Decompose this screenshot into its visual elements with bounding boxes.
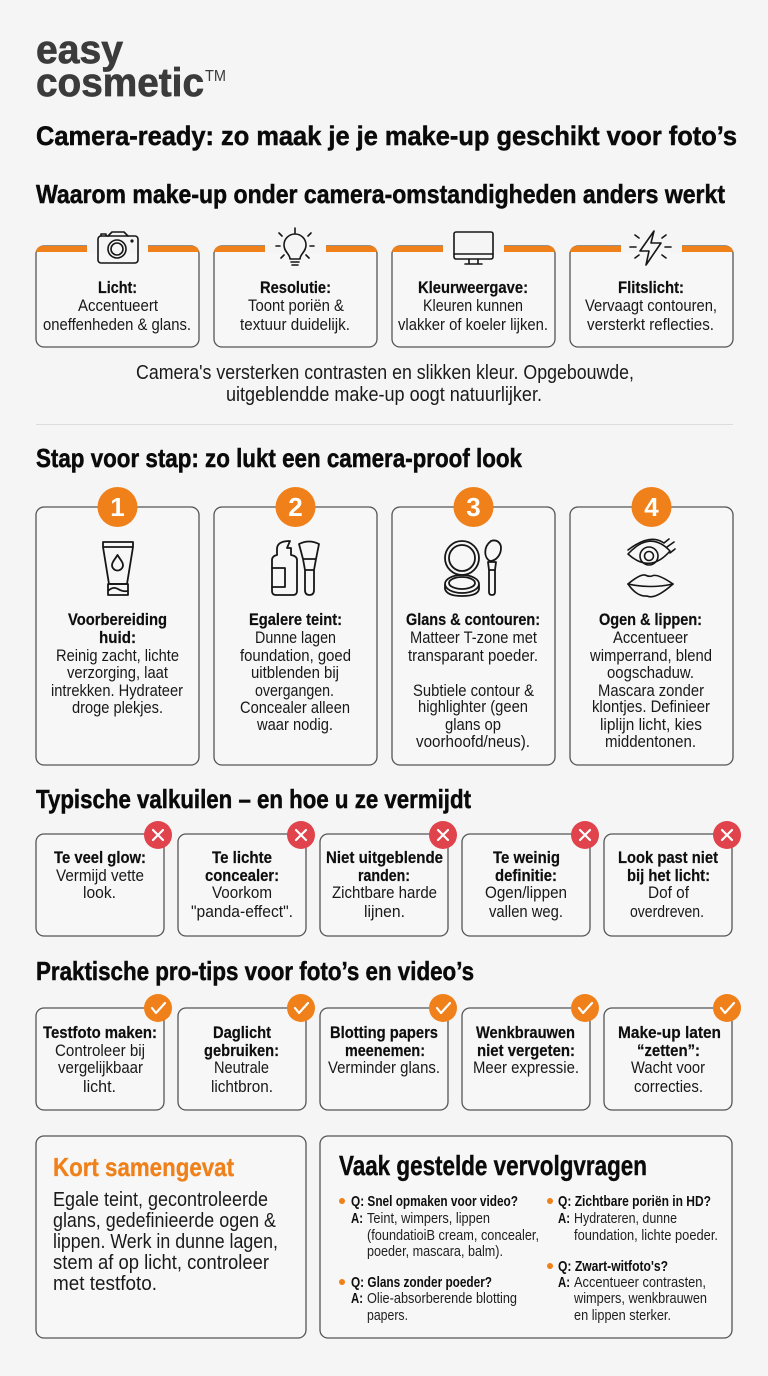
panel: stap 2 — [214, 487, 377, 765]
icon: check badge — [713, 994, 741, 1022]
text: stap 3: transparant poeder. — [408, 646, 538, 665]
text: daglicht — [204, 1023, 279, 1096]
text: stap 1: droge plekjes. — [72, 698, 163, 717]
faq: zichtbare porien — [547, 1193, 718, 1244]
text: stap 4: middentonen. — [605, 732, 696, 751]
panel: valkuil te lichte concealer — [178, 821, 315, 936]
text: te veel glow: Te veel glow: — [54, 848, 146, 867]
faq: glans zonder poeder: A: — [351, 1290, 363, 1307]
text: stap 2: uitblenden bij — [251, 663, 339, 682]
panel: licht — [36, 232, 199, 347]
panel: tip wenkbrauwen — [462, 994, 599, 1110]
text: stap 3: highlighter (geen — [418, 697, 528, 716]
icon: eye and lips — [628, 539, 675, 597]
logo — [36, 28, 226, 105]
text: stap 1: huid: — [99, 628, 136, 647]
icon: foundation and brush — [272, 541, 319, 595]
icon: cross badge — [429, 821, 457, 849]
icon: check badge — [429, 994, 457, 1022]
text: te weinig definitie: vallen weg. — [489, 902, 563, 921]
text: stap 4: oogschaduw. — [607, 663, 694, 682]
text: stap 1 — [51, 610, 183, 717]
text: te veel glow: look. — [83, 883, 116, 902]
heading: valkuilen: Typische valkuilen – en hoe u ze vermijdt — [36, 784, 471, 814]
panel: vervolgvragen — [320, 1136, 732, 1338]
text: kleurweergave: Kleurweergave: — [418, 278, 528, 297]
badge: 4 — [632, 487, 672, 527]
text: look past niet: Dof of — [648, 883, 689, 902]
panel: kleurweergave — [392, 232, 555, 347]
faq: zwart-witfoto's — [547, 1258, 707, 1324]
text: stap 1: Reinig zacht, lichte — [56, 646, 179, 665]
icon: check badge — [287, 994, 315, 1022]
panel: kort samengevat — [36, 1136, 306, 1338]
text: kleurweergave: vlakker of koeler lijken. — [398, 315, 548, 334]
icon: compact and brush — [445, 540, 501, 596]
text: testfoto: licht. — [83, 1077, 116, 1096]
faq: snel opmaken — [339, 1193, 539, 1260]
logo: cosmetic — [36, 61, 204, 105]
faq: snel opmaken: A: — [351, 1210, 363, 1227]
text: stap 3: Glans & contouren: — [406, 610, 540, 629]
faq: snel opmaken: Teint, wimpers, lippen — [367, 1210, 490, 1227]
text: stap 3: Matteer T-zone met — [410, 628, 537, 647]
text: testfoto — [43, 1023, 157, 1096]
text: resolutie: textuur duidelijk. — [240, 315, 350, 334]
text: blotting papers: Blotting papers — [330, 1023, 438, 1042]
faq: snel opmaken: Q: Snel opmaken voor video? — [351, 1193, 518, 1210]
icon: cross badge — [713, 821, 741, 849]
heading: stap voor stap: Stap voor stap: zo lukt een camera-proof look — [36, 443, 522, 473]
panel: flitslicht — [570, 231, 733, 347]
faq: glans zonder poeder: Olie-absorberende blotting — [367, 1290, 517, 1307]
text: samenvatting: met testfoto. — [53, 1273, 157, 1295]
text: licht — [43, 278, 191, 334]
text: look past niet — [618, 848, 718, 921]
faq: glans zonder poeder: papers. — [367, 1307, 408, 1324]
text: stap 4: Accentueer — [613, 628, 688, 647]
text: make-up laten zetten — [618, 1023, 721, 1096]
text: niet uitgeblende randen: randen: — [358, 866, 410, 885]
text: kleurweergave: Kleuren kunnen — [423, 296, 523, 315]
text: te lichte concealer: concealer: — [205, 866, 279, 885]
icon: tube — [103, 542, 133, 595]
text: flitslicht: Vervaagt contouren, — [585, 296, 717, 315]
text: look past niet: overdreven. — [630, 902, 704, 921]
icon: monitor — [454, 232, 493, 264]
text: samenvatting: glans, gedefinieerde ogen & — [53, 1210, 277, 1232]
panel: tip testfoto — [36, 994, 172, 1110]
text: stap 4: wimperrand, blend — [589, 646, 712, 665]
panel: resolutie — [214, 228, 377, 347]
text: flitslicht: Flitslicht: — [618, 278, 684, 297]
faq: glans zonder poeder: Q: Glans zonder poeder? — [351, 1274, 492, 1291]
text: daglicht: Daglicht — [213, 1023, 271, 1042]
text: blotting papers: Verminder glans. — [328, 1058, 440, 1077]
text: look past niet: Look past niet — [618, 848, 718, 867]
text: intro paragraph: uitgeblendde make-up oogt natuurlijker. — [226, 384, 542, 406]
icon: cross badge — [144, 821, 172, 849]
text: te lichte concealer: "panda-effect". — [191, 902, 293, 921]
text: testfoto: vergelijkbaar — [58, 1058, 143, 1077]
faq: glans zonder poeder — [339, 1274, 517, 1324]
text: licht: Licht: — [98, 278, 137, 297]
text: stap 1: Voorbereiding — [68, 610, 167, 629]
text: resolutie: Toont poriën & — [248, 296, 345, 315]
text: te lichte concealer: Voorkom — [212, 883, 272, 902]
text: wenkbrauwen: Wenkbrauwen — [476, 1023, 575, 1042]
text: make-up laten zetten: “zetten”: — [637, 1041, 700, 1060]
icon: camera — [98, 232, 138, 263]
icon: check badge — [571, 994, 599, 1022]
panel: stap 3 — [392, 487, 555, 765]
badge: 2 — [276, 487, 316, 527]
text: te weinig definitie: Ogen/lippen — [485, 883, 567, 902]
badge: 4: 4 — [644, 492, 659, 522]
text: make-up laten zetten: correcties. — [634, 1077, 703, 1096]
icon: cross badge — [287, 821, 315, 849]
panel: tip blotting papers — [320, 994, 457, 1110]
text: make-up laten zetten: Make-up laten — [618, 1023, 721, 1042]
faq: zichtbare porien: A: — [558, 1210, 570, 1227]
heading: pro-tips: Praktische pro-tips voor foto’s en video’s — [36, 956, 474, 986]
text: resolutie — [240, 278, 350, 334]
text: testfoto: Testfoto maken: — [43, 1023, 157, 1042]
text: intro paragraph: Camera's versterken contrasten en slikken kleur. Opgebouwde, — [136, 362, 634, 384]
text: stap 1: intrekken. Hydrateer — [51, 681, 183, 700]
faq: zwart-witfoto's: Q: Zwart-witfoto's? — [558, 1258, 668, 1275]
faq: zwart-witfoto's: Accentueer contrasten, — [574, 1274, 706, 1291]
text: te weinig definitie: Te weinig — [493, 848, 560, 867]
text: flitslicht: versterkt reflecties. — [587, 315, 714, 334]
text: flitslicht — [585, 278, 717, 334]
text: stap 2: Egalere teint: — [249, 610, 342, 629]
panel: valkuil te veel glow — [36, 821, 172, 936]
text: wenkbrauwen — [473, 1023, 579, 1077]
faq: zwart-witfoto's: A: — [558, 1274, 570, 1291]
text: make-up laten zetten: Wacht voor — [631, 1058, 705, 1077]
text: stap 2: overgangen. — [255, 681, 334, 700]
text: te lichte concealer — [191, 848, 293, 921]
heading: kort samengevat: Kort samengevat — [53, 1152, 234, 1182]
text: te veel glow: Vermijd vette — [56, 866, 144, 885]
text: stap 3: Subtiele contour & — [413, 681, 535, 700]
faq: zichtbare porien: Hydrateren, dunne — [574, 1210, 677, 1227]
text: stap 1: verzorging, laat — [67, 663, 168, 682]
logo: TM — [205, 68, 226, 85]
icon: flash — [630, 231, 671, 265]
text: wenkbrauwen: Meer expressie. — [473, 1058, 579, 1077]
text: daglicht: Neutrale — [214, 1058, 269, 1077]
text: te weinig definitie: definitie: — [495, 866, 557, 885]
badge: 2: 2 — [288, 492, 303, 522]
text: samenvatting: stem af op licht, controleer — [53, 1252, 269, 1274]
text: stap 2 — [240, 610, 351, 734]
panel: tip daglicht — [178, 994, 315, 1110]
text: stap 4 — [589, 610, 712, 751]
text: te veel glow — [54, 848, 146, 902]
icon: cross badge — [571, 821, 599, 849]
text: stap 2: Concealer alleen — [240, 698, 350, 717]
text: kleurweergave — [398, 278, 548, 334]
text: samenvatting: lippen. Werk in dunne lagen, — [53, 1231, 278, 1253]
icon: check badge — [144, 994, 172, 1022]
text: niet uitgeblende randen — [326, 848, 443, 921]
text: niet uitgeblende randen: lijnen. — [364, 902, 405, 921]
panel: valkuil te weinig definitie — [462, 821, 599, 936]
text: te lichte concealer: Te lichte — [212, 848, 272, 867]
text: licht: oneffenheden & glans. — [43, 315, 191, 334]
text: samenvatting: Egale teint, gecontroleerde — [53, 1189, 268, 1211]
badge: 3: 3 — [466, 492, 481, 522]
text: blotting papers: meenemen: — [345, 1041, 425, 1060]
text: niet uitgeblende randen: Zichtbare harde — [332, 883, 437, 902]
text: testfoto: Controleer bij — [55, 1041, 145, 1060]
text: stap 2: Dunne lagen — [255, 628, 336, 647]
text: licht: Accentueert — [78, 296, 158, 315]
faq: snel opmaken: poeder, mascara, balm). — [367, 1243, 503, 1260]
faq: zichtbare porien: Q: Zichtbare poriën in HD? — [558, 1193, 711, 1210]
text: blotting papers — [328, 1023, 440, 1077]
text: intro paragraph — [136, 362, 634, 406]
text: niet uitgeblende randen: Niet uitgeblende — [326, 848, 443, 867]
text: stap 4: liplijn licht, kies — [600, 715, 702, 734]
text: daglicht: gebruiken: — [204, 1041, 279, 1060]
text: daglicht: lichtbron. — [211, 1077, 273, 1096]
badge: 1 — [98, 487, 138, 527]
heading: vervolgvragen: Vaak gestelde vervolgvragen — [339, 1150, 647, 1181]
text: stap 2: waar nodig. — [256, 715, 333, 734]
badge: 1: 1 — [110, 492, 125, 522]
panel: stap 4 — [570, 487, 733, 765]
text: resolutie: Resolutie: — [260, 278, 331, 297]
text: stap 2: foundation, goed — [240, 646, 351, 665]
text: stap 4: Mascara zonder — [598, 681, 704, 700]
panel: valkuil niet uitgeblende randen — [320, 821, 457, 936]
text: stap 3: voorhoofd/neus). — [416, 732, 530, 751]
text: look past niet: bij het licht: — [627, 866, 710, 885]
title: Camera-ready: zo maak je je make-up geschikt voor foto’s — [36, 121, 737, 151]
text: te weinig definitie — [485, 848, 567, 921]
panel: valkuil look past niet — [604, 821, 741, 936]
icon: light bulb — [276, 228, 314, 265]
faq: snel opmaken: (foundatioiB cream, concealer, — [367, 1227, 539, 1244]
badge: 3 — [454, 487, 494, 527]
panel: stap 1 — [36, 487, 199, 765]
text: stap 4: Ogen & lippen: — [599, 610, 702, 629]
text: stap 3 — [406, 610, 540, 751]
text: stap 3: glans op — [445, 715, 501, 734]
faq: zwart-witfoto's: wimpers, wenkbrauwen — [573, 1290, 707, 1307]
text: wenkbrauwen: niet vergeten: — [477, 1041, 575, 1060]
logo: easy — [36, 28, 124, 72]
panel: tip make-up laten zetten — [604, 994, 741, 1110]
text: stap 4: klontjes. Definieer — [592, 697, 710, 716]
text: samenvatting — [53, 1189, 278, 1295]
faq: zichtbare porien: foundation, lichte poeder. — [574, 1227, 718, 1244]
faq: zwart-witfoto's: en lippen sterker. — [574, 1307, 671, 1324]
